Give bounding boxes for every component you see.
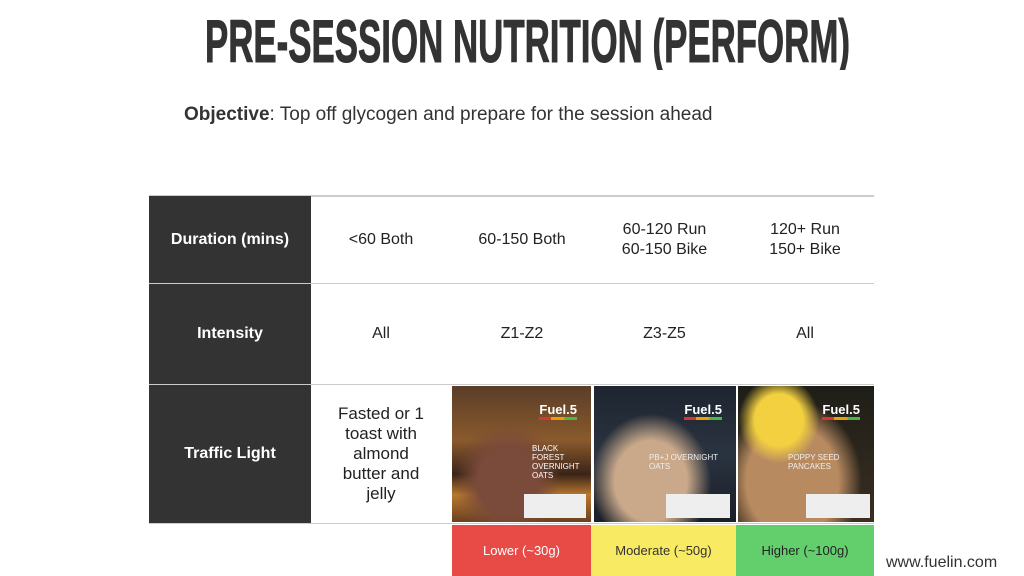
photo: overnight oats [594,386,736,522]
row label: intensity [149,284,311,384]
intensity cells: All [796,325,814,342]
row label: intensity: Intensity [197,325,263,342]
photo: overnight oats: PB+J OVERNIGHT OATS [649,453,718,471]
photo: pancakes [738,386,874,522]
bar: higher [736,525,874,576]
bar: lower [452,525,591,576]
intensity cells: All [372,325,390,342]
photo: pancakes: POPPY SEED PANCAKES [788,453,839,471]
bar: moderate: Moderate (~50g) [615,543,712,558]
duration cells: 60-150 Both [478,230,566,248]
fasted text: Fasted or 1 toast with almond butter and jelly [338,404,424,503]
objective text: Objective: Top off glycogen and prepare for the session ahead [184,104,712,125]
photo: black forest oats [452,386,591,522]
duration cells: 60-150 Bike [622,240,707,258]
photo: black forest oats: BLACK FOREST OVERNIGHT OATS [532,444,579,480]
intensity cells: Z3-Z5 [643,325,686,342]
duration cells: <60 Both [349,230,413,248]
row label: duration: Duration (mins) [171,230,289,248]
photo: pancakes: Fuel.5 [822,402,860,417]
duration cells [349,220,841,258]
duration cells: 150+ Bike [769,240,841,258]
duration cells: 60-120 Run [623,220,706,238]
intensity cells: Z1-Z2 [501,325,543,342]
website url: www.fuelin.com [886,554,997,571]
duration cells: 120+ Run [770,220,840,238]
photo: black forest oats: Fuel.5 [539,402,577,417]
bar: lower: Lower (~30g) [483,543,560,558]
row label: duration [149,196,311,283]
row label: traffic light: Traffic Light [184,445,276,462]
bar: moderate [591,525,736,576]
bar: higher: Higher (~100g) [761,543,849,558]
row label: traffic light [149,385,311,523]
intensity cells [372,325,814,342]
photo: overnight oats: Fuel.5 [684,402,722,417]
